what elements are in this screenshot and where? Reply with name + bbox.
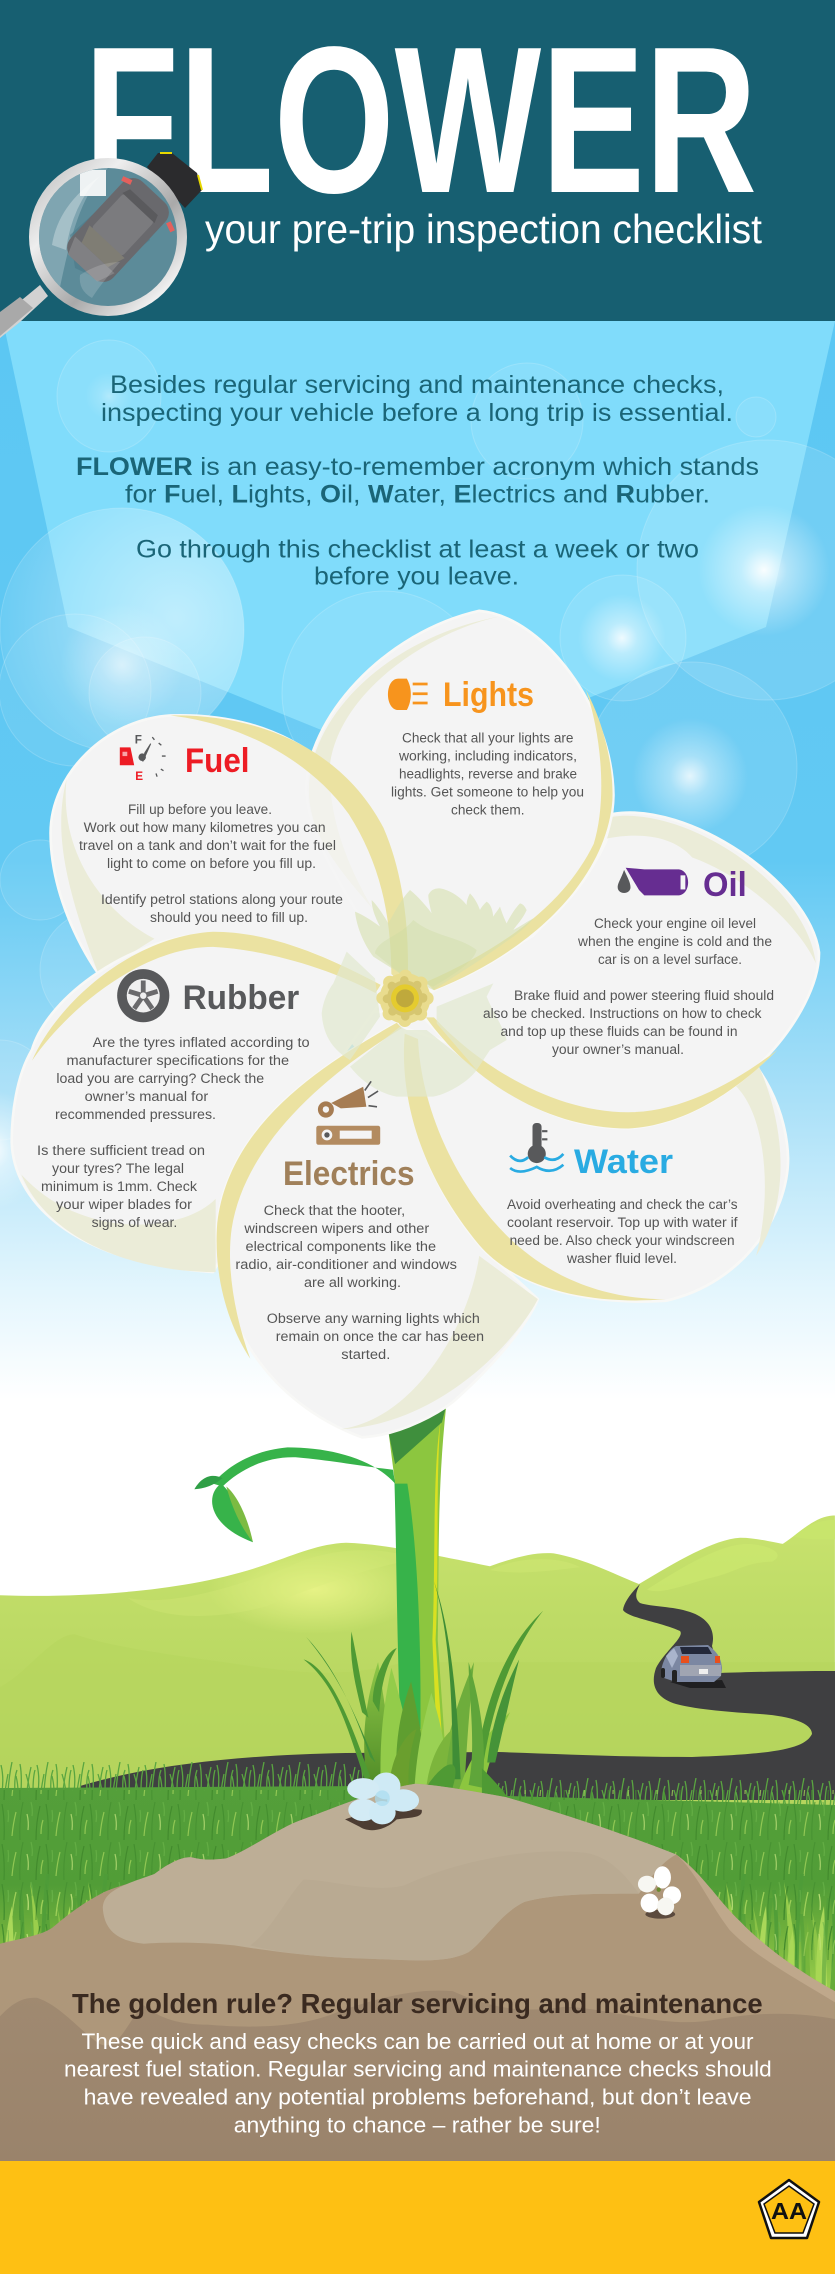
icon: fuel gauge bbox=[120, 733, 166, 783]
stem with branch and leaf bbox=[194, 1406, 446, 1740]
heading: Electrics: Electrics bbox=[283, 1155, 414, 1193]
heading: Rubber: Rubber bbox=[183, 979, 299, 1017]
text: golden rule: These quick and easy checks can be carried out at home or at your bbox=[82, 2029, 754, 2054]
petal: Rubber bbox=[12, 932, 389, 1272]
text: golden rule: have revealed any potential problems beforehand, but don’t leave bbox=[84, 2085, 752, 2110]
text: Fuel bbox=[79, 802, 343, 925]
text: Oil bbox=[483, 916, 774, 1057]
flower head bbox=[12, 611, 819, 1437]
icon: blue flower on the rock bbox=[345, 1773, 422, 1830]
header band bbox=[0, 0, 835, 321]
text: Fuel: travel on a tank and don’t wait for the fuel bbox=[79, 838, 336, 853]
text: golden rule bbox=[64, 2029, 772, 2137]
logo: AA: AA bbox=[771, 2198, 807, 2224]
road bbox=[80, 1584, 835, 1800]
icon: car on the road bbox=[661, 1645, 726, 1688]
intro text bbox=[76, 371, 759, 590]
icon: tyre bbox=[117, 969, 169, 1022]
icon: fuel gauge: F bbox=[135, 733, 142, 747]
text: Electrics: windscreen wipers and other bbox=[243, 1221, 430, 1236]
text: Electrics bbox=[235, 1203, 484, 1362]
petal: Fuel bbox=[51, 715, 410, 1012]
text: Water: washer fluid level. bbox=[566, 1251, 677, 1266]
footer band bbox=[0, 2161, 835, 2274]
petal: Electrics bbox=[217, 1020, 538, 1437]
text: Lights: check them. bbox=[451, 802, 524, 818]
grass tuft at the base of the stem bbox=[304, 1581, 543, 1799]
text: Electrics: radio, air-conditioner and windows bbox=[235, 1257, 457, 1272]
text: Electrics: started. bbox=[341, 1347, 390, 1362]
petal: Water bbox=[404, 1028, 788, 1301]
heading: Water: Water bbox=[574, 1143, 673, 1181]
text: Rubber: your wiper blades for bbox=[56, 1197, 193, 1212]
text: Rubber: recommended pressures. bbox=[55, 1107, 216, 1122]
heading: Lights: Lights bbox=[443, 676, 534, 714]
text: Fuel: Work out how many kilometres you can bbox=[84, 820, 326, 835]
text: Rubber bbox=[37, 1035, 310, 1230]
text: Lights bbox=[391, 730, 584, 818]
text: Water bbox=[507, 1197, 738, 1266]
text: Oil: Brake fluid and power steering fluid should bbox=[514, 988, 774, 1003]
text: Rubber: Is there sufficient tread on bbox=[37, 1143, 205, 1158]
intro text: for Fuel, Lights, Oil, Water, Electrics and Rubber. bbox=[125, 480, 710, 508]
intro text: Go through this checklist at least a week or two bbox=[136, 536, 699, 564]
text: Electrics: electrical components like the bbox=[246, 1239, 436, 1254]
intro text: before you leave. bbox=[314, 562, 519, 590]
text: Oil: your owner’s manual. bbox=[552, 1042, 684, 1057]
text: Oil: Check your engine oil level bbox=[594, 916, 756, 931]
text: golden rule: nearest fuel station. Regular servicing and maintenance checks should bbox=[64, 2057, 772, 2082]
intro text: Besides regular servicing and maintenance checks, bbox=[110, 371, 724, 399]
icons bbox=[117, 679, 688, 1172]
icon: thermometer and waves bbox=[510, 1123, 563, 1172]
text: Electrics: Check that the hooter, bbox=[264, 1203, 405, 1218]
text: Lights: working, including indicators, bbox=[398, 748, 577, 764]
text: Water: need be. Also check your windscreen bbox=[510, 1233, 735, 1248]
text: Fuel: light to come on before you fill up. bbox=[107, 856, 316, 871]
text: Lights: lights. Get someone to help you bbox=[391, 784, 584, 800]
text: Oil: and top up these fluids can be found in bbox=[500, 1024, 738, 1039]
text: Electrics: remain on once the car has been bbox=[276, 1329, 484, 1344]
text: Lights: Check that all your lights are bbox=[402, 730, 574, 746]
icon: oil can bbox=[618, 868, 688, 895]
flower centre with faint stamen shapes bbox=[322, 888, 533, 1097]
text: Fuel: Identify petrol stations along your route bbox=[101, 892, 343, 907]
bokeh light circles bbox=[0, 340, 835, 1210]
icon: fuel gauge: E bbox=[135, 769, 143, 783]
heading: golden rule: The golden rule? Regular servicing and maintenance bbox=[72, 1988, 763, 2019]
text: golden rule: anything to chance – rather be sure! bbox=[234, 2112, 601, 2137]
text: Water: coolant reservoir. Top up with water if bbox=[507, 1215, 738, 1230]
heading: Fuel: Fuel bbox=[185, 742, 250, 780]
text: Rubber: load you are carrying? Check the bbox=[56, 1071, 264, 1086]
foreground grass bbox=[0, 1762, 835, 2044]
text: Electrics: are all working. bbox=[304, 1275, 401, 1290]
petal edge: Fuel bbox=[170, 715, 408, 990]
text: Oil: also be checked. Instructions on how to check bbox=[483, 1006, 762, 1021]
intro text: FLOWER is an easy-to-remember acronym which stands bbox=[76, 453, 759, 481]
text: Water: Avoid overheating and check the car’s bbox=[507, 1197, 738, 1212]
rock mound bbox=[0, 1784, 835, 2164]
heading: Oil: Oil bbox=[703, 866, 747, 904]
text: Rubber: Are the tyres inflated according to bbox=[93, 1035, 310, 1050]
icon: white flower on the rock bbox=[638, 1866, 681, 1919]
text: Oil: car is on a level surface. bbox=[598, 952, 742, 967]
subtitle: your pre-trip inspection checklist bbox=[205, 206, 763, 252]
petal: Oil bbox=[410, 813, 819, 1128]
text: Fuel: should you need to fill up. bbox=[150, 910, 308, 925]
icon: hooter and radio bbox=[316, 1081, 380, 1145]
text: Rubber: your tyres? The legal bbox=[52, 1161, 184, 1176]
text: Rubber: manufacturer specifications for the bbox=[66, 1053, 289, 1068]
text: Rubber: minimum is 1mm. Check bbox=[41, 1179, 197, 1194]
icon: headlight bbox=[388, 679, 428, 710]
sky background bbox=[0, 321, 835, 1421]
petal: Lights bbox=[306, 611, 613, 998]
text: Fuel: Fill up before you leave. bbox=[128, 802, 272, 817]
text: Lights: headlights, reverse and brake bbox=[399, 766, 577, 782]
text: Oil: when the engine is cold and the bbox=[577, 934, 772, 949]
intro text: inspecting your vehicle before a long trip is essential. bbox=[101, 399, 733, 427]
text: Rubber: signs of wear. bbox=[92, 1215, 177, 1230]
text: Rubber: owner’s manual for bbox=[85, 1089, 209, 1104]
logo: AA bbox=[759, 2180, 819, 2238]
icon: magnifying glass over car bbox=[0, 153, 202, 338]
hills bbox=[0, 1516, 835, 1805]
text: Electrics: Observe any warning lights which bbox=[267, 1311, 480, 1326]
petal: Fuel overlap bbox=[309, 774, 372, 908]
